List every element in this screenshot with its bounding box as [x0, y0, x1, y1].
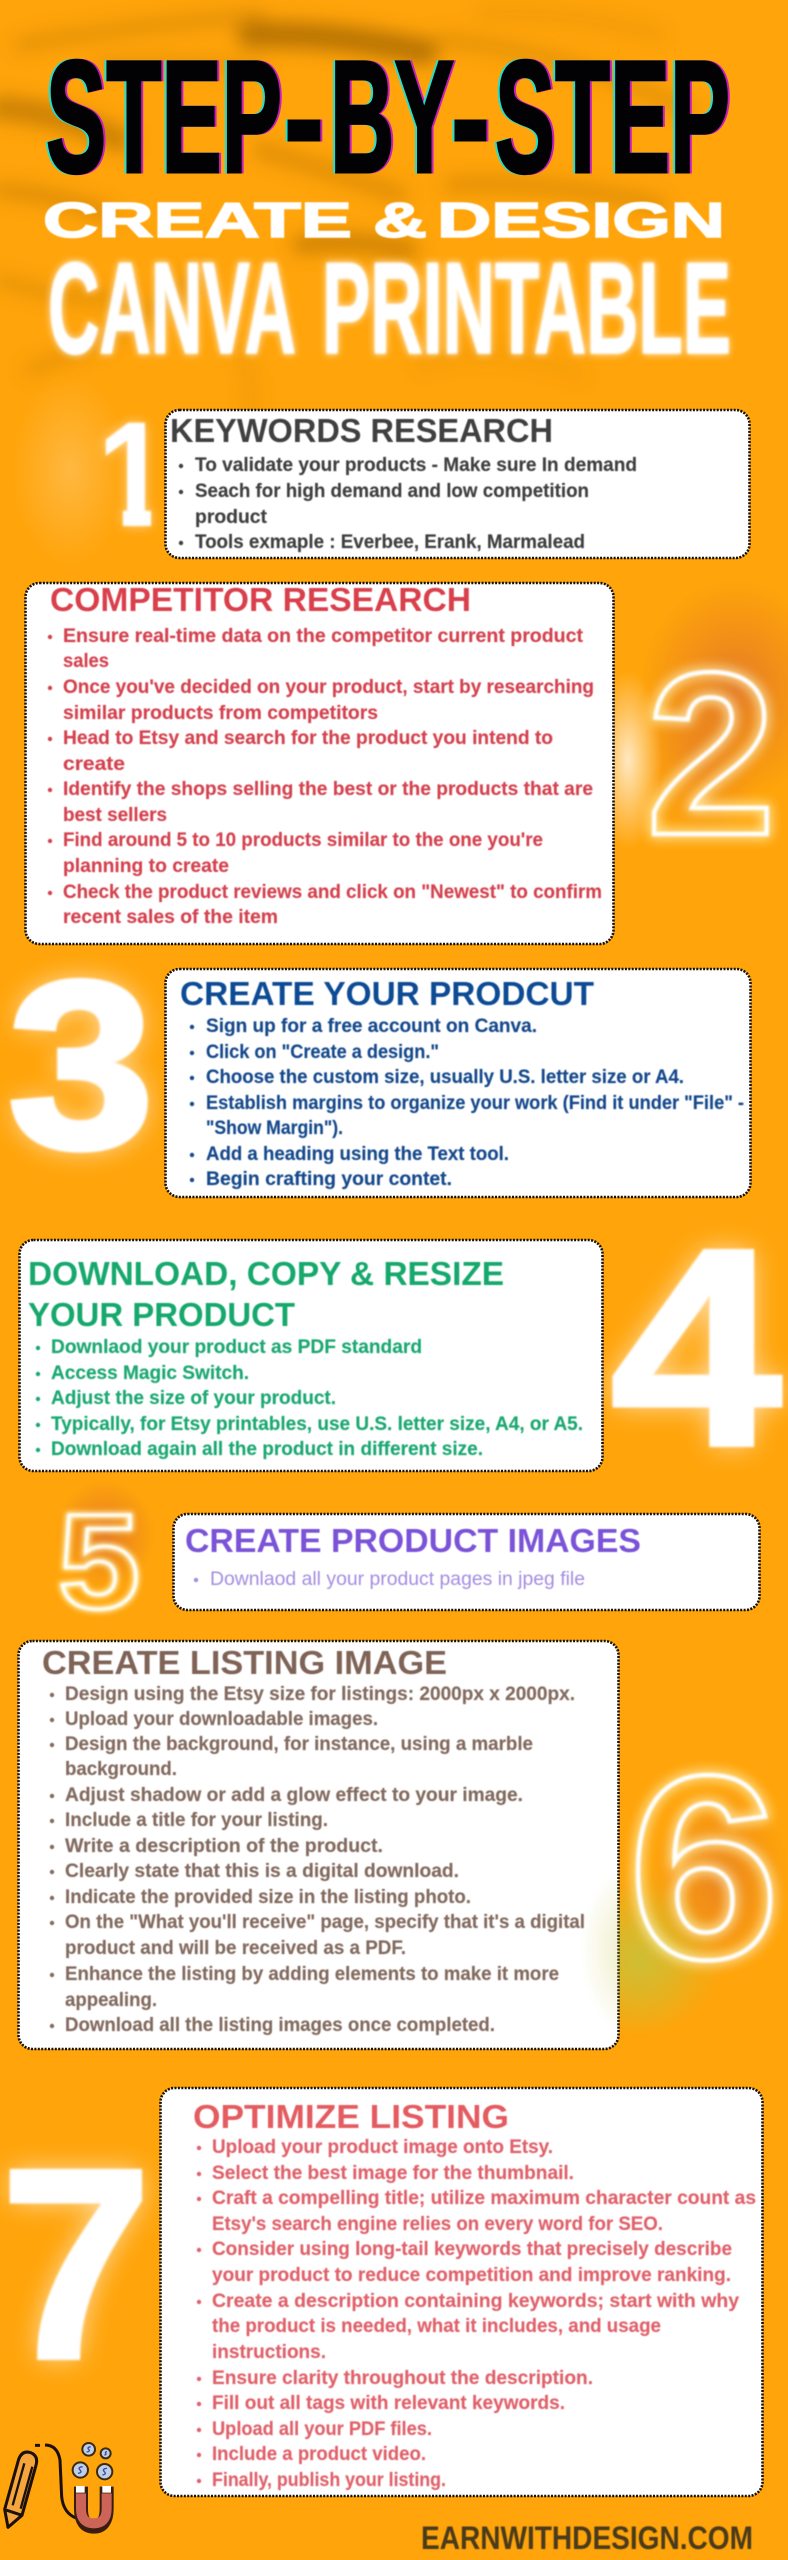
- panel: create your product: [166, 969, 750, 1197]
- bullet list: [179, 455, 637, 553]
- icon: coins: [73, 2443, 112, 2479]
- bullet list: Craft a compelling title; utilize maximum character count as: [212, 2188, 756, 2209]
- bullet list: Enhance the listing by adding elements to make it more: [65, 1964, 559, 1985]
- bullet list: [190, 1016, 744, 1190]
- bullet list: Choose the custom size, usually U.S. letter size or A4.: [206, 1067, 684, 1088]
- bullet list: To validate your products - Make sure In demand: [195, 455, 637, 476]
- bullet list: [48, 626, 602, 928]
- number 2: 2: [646, 625, 776, 884]
- panel: download, copy and resize: [20, 1240, 602, 1471]
- heading: KEYWORDS RESEARCH: [170, 413, 553, 450]
- heading: CREATE YOUR PRODCUT: [180, 976, 595, 1013]
- bullet list: Find around 5 to 10 products similar to the one you're: [63, 830, 543, 851]
- number 3: 3: [8, 933, 154, 1198]
- title: step-by-step: BY: [330, 27, 454, 206]
- number 4: 4: [610, 1190, 784, 1505]
- bullet list: product: [195, 507, 268, 528]
- number 1: 1: [97, 390, 169, 558]
- bullet list: Head to Etsy and search for the product you intend to: [63, 728, 553, 749]
- number 6: 6: [628, 1721, 780, 2014]
- subtitle: create & design: &: [373, 194, 427, 248]
- number 5: 5: [58, 1486, 140, 1637]
- bullet list: Establish margins to organize your work (Find it under "File" -: [206, 1093, 744, 1114]
- bullet list: Finally, publish your listing.: [212, 2470, 446, 2491]
- bullet list: Clearly state that this is a digital download.: [65, 1861, 459, 1882]
- bullet list: Download again all the product in different size.: [51, 1439, 483, 1460]
- number 5: 5: [58, 1486, 140, 1637]
- subtitle: create & design: CREATE: [43, 194, 352, 248]
- bullet list: Downlaod your product as PDF standard: [51, 1337, 422, 1358]
- title: canva printable: [48, 235, 731, 381]
- bullet list: similar products from competitors: [63, 703, 378, 724]
- bullet list: On the "What you'll receive" page, specify that it's a digital: [65, 1912, 585, 1933]
- subtitle: create & design: [43, 194, 725, 248]
- bullet list: Include a product video.: [212, 2444, 426, 2465]
- number 4: 4: [610, 1190, 784, 1505]
- bullet list: Add a heading using the Text tool.: [206, 1144, 509, 1165]
- bullet list: appealing.: [65, 1990, 157, 2011]
- bullet list: [50, 1684, 585, 2036]
- green fade on listing panel: [580, 1860, 700, 2040]
- number 7: 7: [0, 2112, 152, 2416]
- bullet list: Indicate the provided size in the listing photo.: [65, 1887, 471, 1908]
- bullet list: Ensure real-time data on the competitor current product: [63, 626, 584, 647]
- icon: pencil and magnet with coins: [5, 2443, 112, 2527]
- subtitle: create & design: DESIGN: [437, 194, 725, 248]
- number 6: 6: [628, 1721, 780, 2014]
- bullet list: Click on "Create a design.": [206, 1042, 439, 1063]
- bullet list: create: [63, 754, 125, 775]
- bullet list: the product is needed, what it includes, and usage: [212, 2316, 661, 2337]
- title: canva printable: CANVA: [48, 235, 296, 381]
- heading: [28, 1256, 504, 1334]
- bullet list: Typically, for Etsy printables, use U.S. letter size, A4, or A5.: [51, 1414, 583, 1435]
- bullet list: Identify the shops selling the best or the products that are: [63, 779, 593, 800]
- title: step-by-step: -: [284, 27, 324, 206]
- bullet list: Downlaod all your product pages in jpeg file: [210, 1569, 585, 1590]
- bullet list: Consider using long-tail keywords that precisely describe: [212, 2239, 732, 2260]
- heading: OPTIMIZE LISTING: [193, 2099, 509, 2136]
- bullet list: Access Magic Switch.: [51, 1363, 249, 1384]
- bullet list: Fill out all tags with relevant keywords.: [212, 2393, 565, 2414]
- panel: competitor research: [26, 582, 614, 944]
- number 2: 2: [646, 625, 776, 884]
- title: canva printable: CANVA: [48, 235, 296, 381]
- icon: magnet: [76, 2486, 111, 2527]
- bullet list: Select the best image for the thumbnail.: [212, 2163, 574, 2184]
- bullet list: planning to create: [63, 856, 229, 877]
- number 3: 3: [8, 933, 154, 1198]
- bullet list: Adjust the size of your product.: [51, 1388, 336, 1409]
- icon: wire: [35, 2445, 77, 2518]
- bullet list: Sign up for a free account on Canva.: [206, 1016, 537, 1037]
- panel: create product images: [174, 1514, 760, 1610]
- bullet list: sales: [63, 651, 109, 672]
- heading: YOUR PRODUCT: [28, 1297, 296, 1334]
- number 1: 1: [97, 390, 169, 558]
- bullet list: Tools exmaple : Everbee, Erank, Marmalead: [195, 532, 585, 553]
- bullet list: Upload all your PDF files.: [212, 2419, 432, 2440]
- bullet list: best sellers: [63, 805, 167, 826]
- bullet list: Design the background, for instance, using a marble: [65, 1734, 533, 1755]
- bullet list: Once you've decided on your product, start by researching: [63, 677, 594, 698]
- glow spots: [10, 370, 788, 2035]
- bullet list: Begin crafting your contet.: [206, 1169, 452, 1190]
- bullet list: Seach for high demand and low competition: [195, 481, 589, 502]
- heading: CREATE PRODUCT IMAGES: [185, 1523, 641, 1560]
- number 7: 7: [0, 2112, 152, 2416]
- bullet list: [36, 1337, 583, 1460]
- bullet list: "Show Margin").: [206, 1118, 343, 1139]
- bullet list: Include a title for your listing.: [65, 1810, 328, 1831]
- title: step-by-step: STEP: [46, 27, 282, 206]
- bullet list: your product to reduce competition and improve ranking.: [212, 2265, 731, 2286]
- bullet list: Create a description containing keywords; start with why: [212, 2291, 739, 2312]
- panel: keywords research: [166, 410, 750, 558]
- bullet list: [197, 2137, 756, 2491]
- title: step-by-step: -: [451, 27, 490, 206]
- bullet list: Design using the Etsy size for listings: 2000px x 2000px.: [65, 1684, 575, 1705]
- bullet list: Adjust shadow or add a glow effect to your image.: [65, 1785, 523, 1806]
- panel: optimize listing: [160, 2088, 762, 2496]
- heading: DOWNLOAD, COPY & RESIZE: [28, 1256, 504, 1293]
- bullet list: background.: [65, 1759, 177, 1780]
- panel: create listing image: [18, 1641, 618, 2049]
- bullet list: Upload your product image onto Etsy.: [212, 2137, 553, 2158]
- heading: CREATE LISTING IMAGE: [42, 1645, 447, 1682]
- icon: pencil: [5, 2452, 37, 2527]
- bullet list: Ensure clarity throughout the description.: [212, 2368, 593, 2389]
- bullet list: Download all the listing images once completed.: [65, 2015, 495, 2036]
- number 1: [98, 414, 159, 534]
- bullet list: recent sales of the item: [63, 907, 278, 928]
- bullet list: Check the product reviews and click on "Newest" to confirm: [63, 882, 602, 903]
- heading: COMPETITOR RESEARCH: [50, 582, 471, 619]
- bullet list: instructions.: [212, 2342, 326, 2363]
- bullet list: Etsy's search engine relies on every word for SEO.: [212, 2214, 663, 2235]
- bullet list: product and will be received as a PDF.: [65, 1938, 406, 1959]
- title: step-by-step: [46, 27, 730, 206]
- bullet list: Write a description of the product.: [65, 1836, 383, 1857]
- bullet list: Upload your downloadable images.: [65, 1709, 378, 1730]
- palm leaf shadow: [0, 14, 690, 450]
